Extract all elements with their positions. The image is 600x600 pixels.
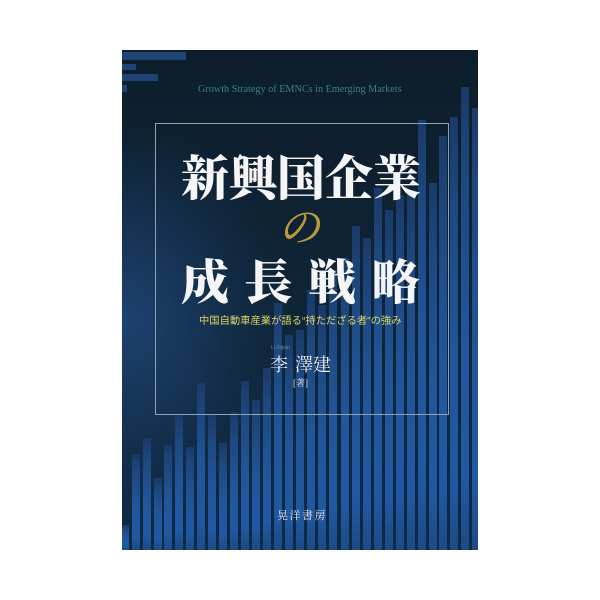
author: 李 澤建 xyxy=(270,355,331,375)
English subtitle: Growth Strategy of EMNCs in Emerging Markets xyxy=(198,84,402,95)
gold character: の xyxy=(278,206,320,252)
title line 1: 新興国企業 xyxy=(181,153,421,206)
bar chart motif xyxy=(122,87,478,550)
author role: [著] xyxy=(293,378,308,388)
background xyxy=(122,50,478,550)
book cover xyxy=(122,50,478,550)
horizontal bars top left xyxy=(122,52,186,92)
publisher: 晃洋書房 xyxy=(277,510,327,522)
author romanized: Li Zejian xyxy=(271,345,290,351)
subtitle: 中国自動車産業が語る“持ただざる者”の強み xyxy=(199,316,402,327)
title line 2: 成長戦略 xyxy=(181,257,435,310)
title frame xyxy=(156,124,448,414)
